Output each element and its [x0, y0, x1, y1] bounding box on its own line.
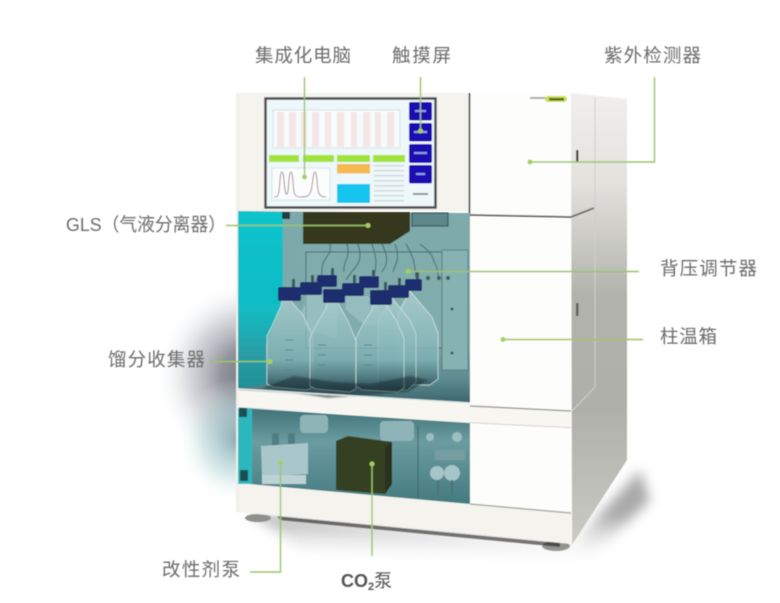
status text	[413, 193, 428, 195]
right door: lower	[470, 423, 571, 513]
back bottles	[301, 291, 438, 390]
CO2 pump box	[336, 436, 392, 494]
base	[236, 483, 571, 544]
upper small valves	[300, 415, 414, 441]
shadow behind instrument	[155, 280, 650, 570]
label: GLS: GLS（气液分离器）	[66, 214, 226, 235]
brand badge	[530, 96, 567, 102]
label: CO2 pump: CO	[341, 571, 368, 591]
side handles	[576, 150, 578, 316]
teal panel	[238, 211, 283, 388]
instrument side panel	[571, 93, 627, 545]
fittings	[426, 276, 454, 354]
shelf	[236, 390, 571, 428]
label: modifier pump: 改性剂泵	[162, 559, 240, 580]
callout lines	[210, 77, 654, 572]
label: integrated computer: 集成化电脑	[255, 45, 351, 66]
bottle: front left	[267, 301, 313, 390]
teal strip	[238, 408, 252, 484]
green status tabs	[269, 155, 405, 162]
data list	[374, 165, 404, 202]
top front panel	[236, 93, 470, 211]
GLS dark box	[303, 212, 410, 244]
upper window	[238, 211, 470, 403]
lower window	[238, 408, 470, 504]
label: fraction collector: 馏分收集器	[108, 349, 205, 370]
touch screen	[266, 98, 436, 208]
callout dots	[268, 128, 532, 466]
modifier pump	[261, 433, 308, 484]
label: CO2 pump: 2	[368, 581, 374, 593]
bottom chromatogram	[272, 168, 330, 200]
label: CO2 pump: 泵	[374, 571, 392, 591]
right door: detector	[470, 93, 571, 217]
right valves	[418, 425, 465, 498]
top chromatogram	[273, 110, 400, 148]
cap fittings	[292, 268, 419, 290]
bottle caps	[278, 275, 422, 305]
blue buttons	[409, 102, 432, 184]
right door: column oven	[470, 217, 571, 411]
label: UV detector: 紫外检测器	[604, 45, 701, 66]
label: column oven: 柱温箱	[660, 326, 717, 347]
bottle: front middle	[310, 303, 356, 392]
label: touch screen: 触摸屏	[392, 45, 451, 66]
tubing panel	[412, 213, 448, 226]
orange status box	[337, 164, 370, 174]
cyan status box	[337, 184, 370, 203]
tubes	[316, 244, 438, 282]
label: back pressure regulator: 背压调节器	[660, 258, 757, 279]
feet	[245, 513, 570, 551]
bottle: front right	[356, 305, 404, 392]
bottle bottom shade	[262, 376, 428, 398]
